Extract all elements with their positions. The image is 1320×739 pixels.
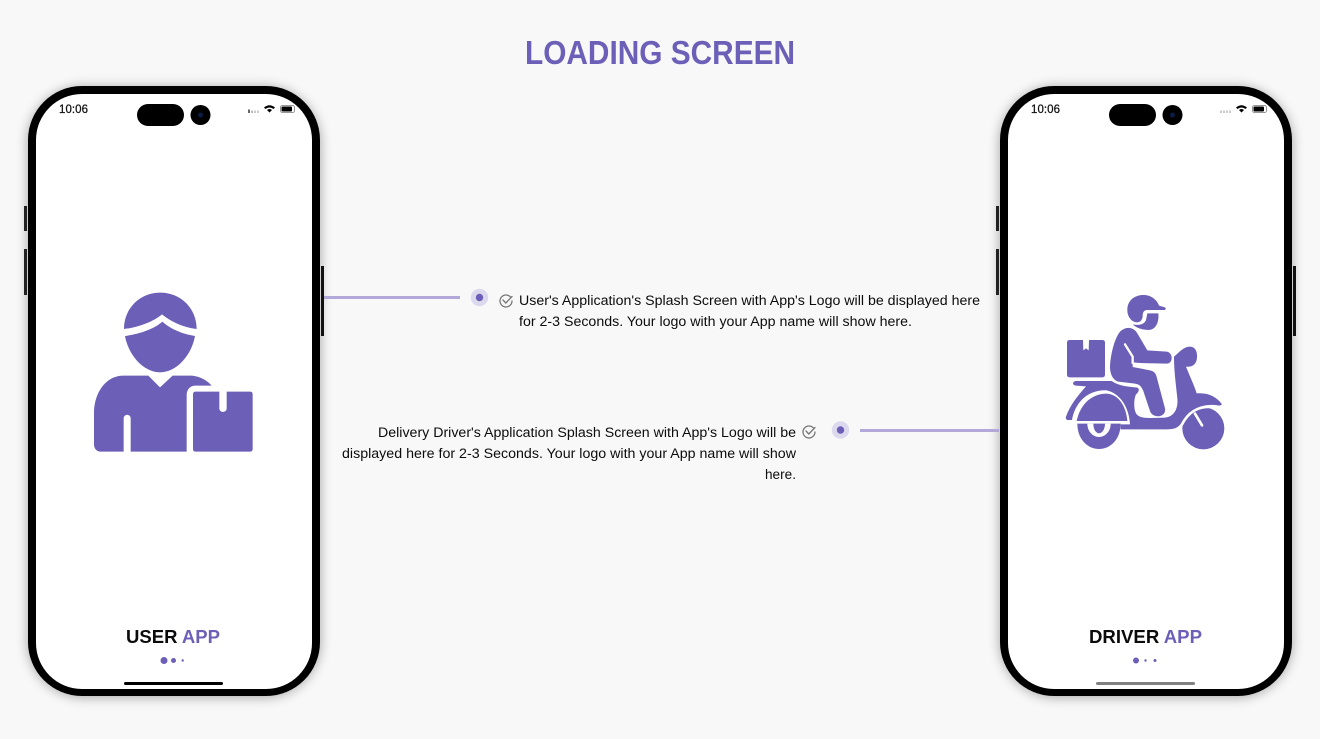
callout connector: user app: [324, 289, 488, 306]
phone: driver app: [996, 86, 1296, 697]
phone: user app: [24, 86, 324, 697]
text block: driver app description: here.: [765, 467, 796, 482]
icon: person with parcel: [94, 293, 253, 452]
home indicator: user app: [124, 682, 223, 685]
text block: driver app description: Delivery Driver's Application Splash Screen with App's Logo will be: [378, 425, 796, 440]
text block: user app description: for 2-3 Seconds. Your logo with your App name will show here.: [519, 314, 912, 329]
pagination dots: user app: [160, 657, 184, 664]
text block: user app description: User's Application's Splash Screen with App's Logo will be displayed here: [519, 293, 980, 308]
app name: user app: USER APP: [126, 626, 220, 647]
text block: driver app description: [342, 425, 796, 482]
status bar: user app: [59, 104, 294, 126]
pagination dots: driver app: [1133, 658, 1156, 664]
status bar: driver app: [1031, 104, 1266, 126]
title: LOADING SCREEN: [525, 35, 795, 72]
status bar: driver app: 10:06: [1031, 104, 1060, 116]
callout connector: driver app: [832, 421, 999, 439]
icon: check mark user: [500, 295, 512, 307]
home indicator: driver app: [1096, 682, 1195, 685]
icon: delivery scooter: [1066, 295, 1224, 449]
status bar: user app: 10:06: [59, 104, 88, 116]
text block: user app description: [519, 293, 980, 329]
app name: driver app: DRIVER APP: [1089, 626, 1202, 647]
icon: check mark driver: [803, 426, 815, 438]
text block: driver app description: displayed here for 2-3 Seconds. Your logo with your App name will show: [342, 446, 796, 461]
